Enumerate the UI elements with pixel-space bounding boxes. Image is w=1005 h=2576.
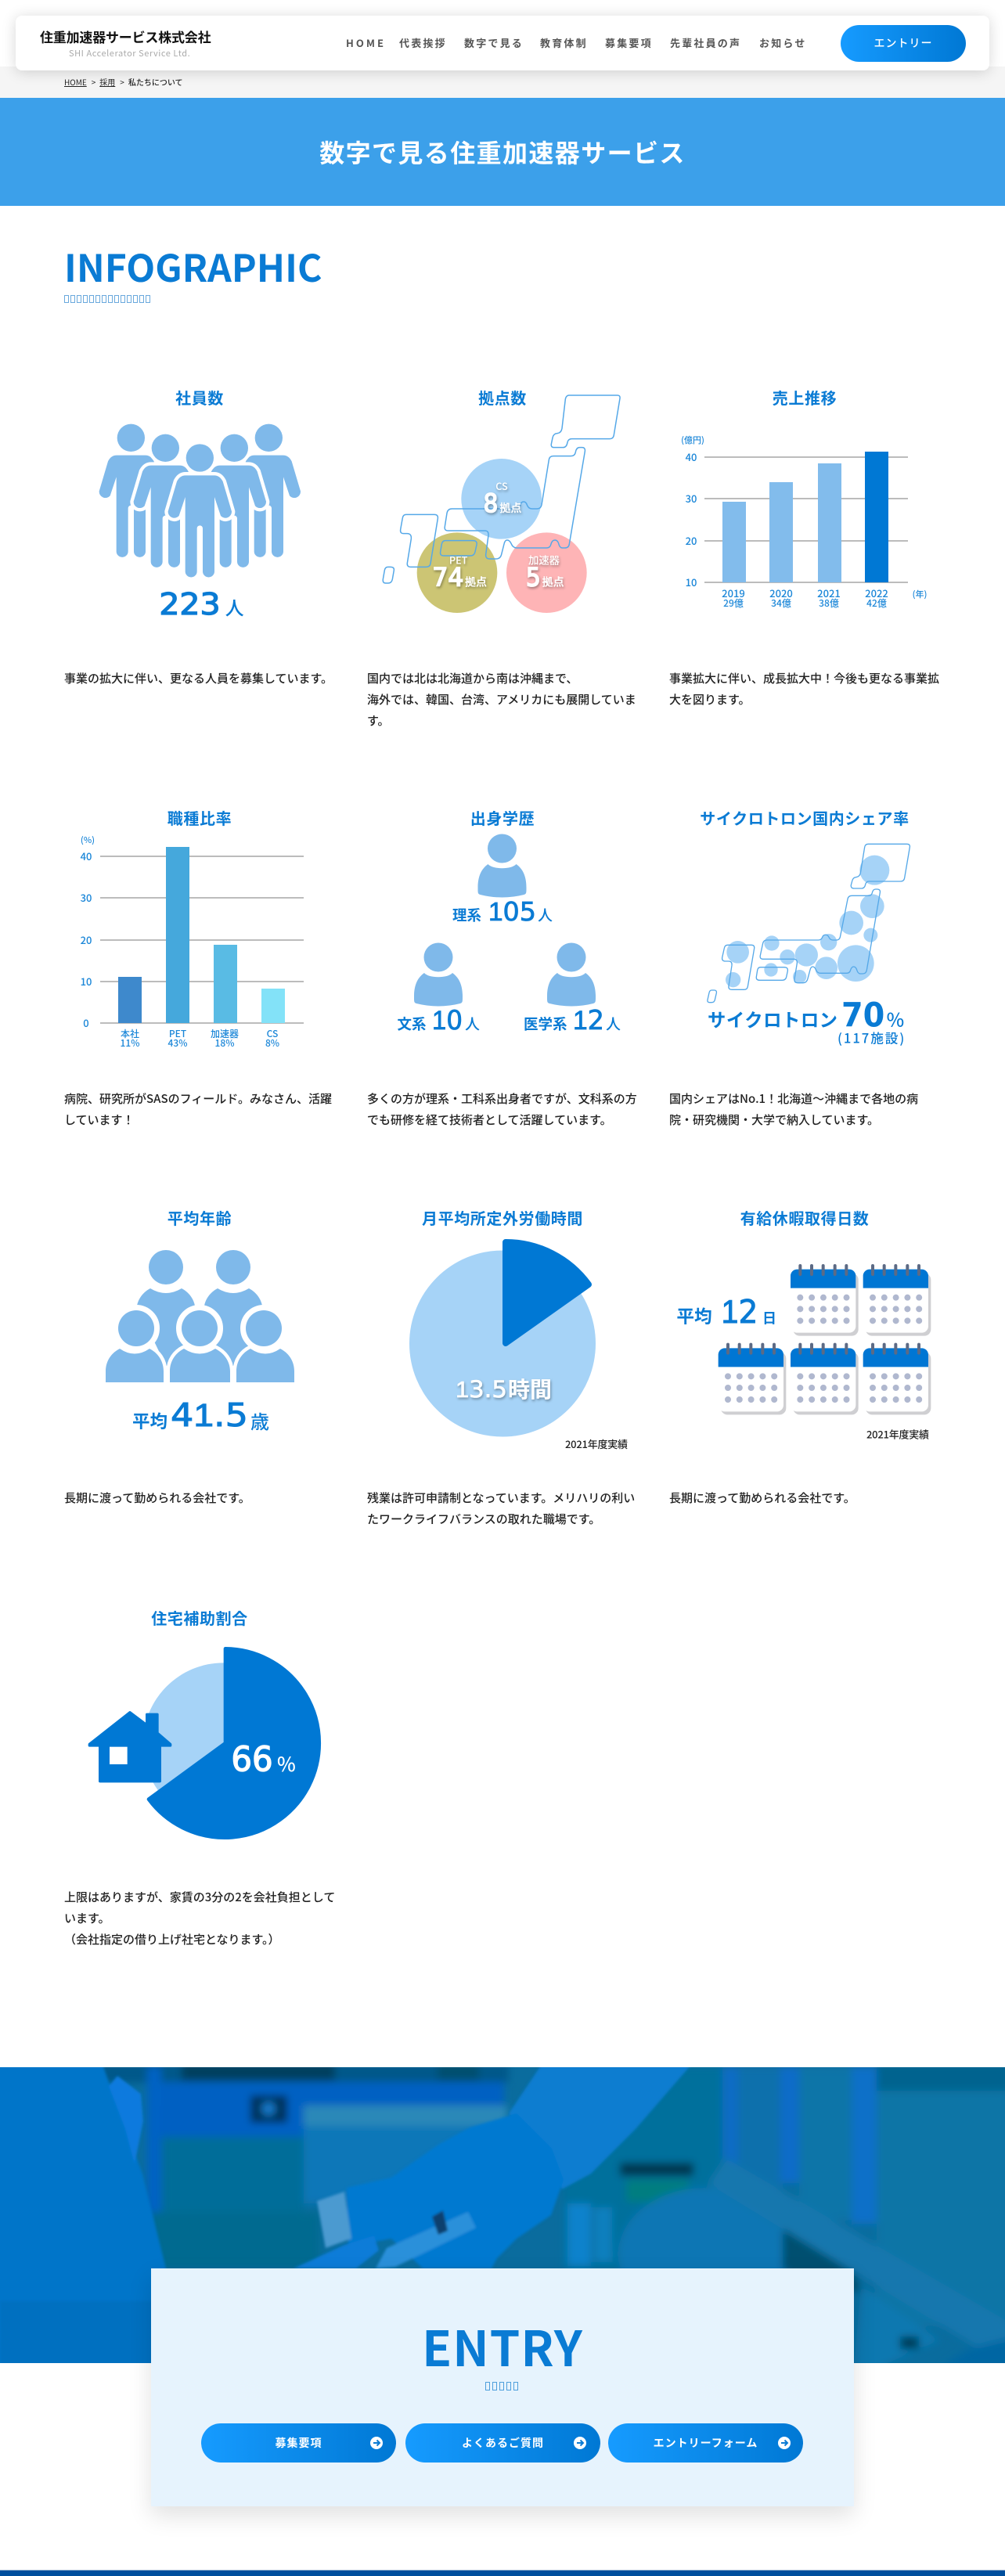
label: accelerator 5: 加速器: [528, 553, 560, 567]
axis labels: 30: [81, 890, 92, 905]
calendar: [719, 1345, 786, 1414]
panel: overtime: [367, 1206, 635, 1527]
icon: five people with count: [99, 424, 301, 622]
description: 海外では、韓国、台湾、アメリカにも展開していま: [367, 691, 636, 708]
value label: [676, 1293, 776, 1331]
note: 2021年度実績: [565, 1436, 628, 1451]
axis labels: [81, 834, 279, 1050]
axis labels: 20: [686, 533, 697, 548]
description: 大を図ります。: [669, 691, 751, 708]
axis labels: PET: [169, 1027, 186, 1040]
share label: (117施設): [838, 1028, 904, 1047]
value: 13.5: [456, 1376, 507, 1403]
heading: 社員数: [175, 386, 224, 409]
axis labels: CS: [267, 1027, 278, 1040]
axis labels: 加速器: [211, 1027, 239, 1040]
axis labels: 38億: [819, 596, 839, 610]
description: [367, 1090, 637, 1128]
medicine: [524, 942, 621, 1036]
breadcrumb background strip: [0, 67, 1005, 98]
icons: three busts with counts: [398, 834, 621, 1036]
navigation: [346, 35, 807, 50]
heading: 住宅補助割合: [151, 1606, 248, 1629]
panel: job types: [64, 806, 332, 1128]
description: います。: [64, 1910, 110, 1926]
footer strip: [0, 2570, 1005, 2576]
description: 多くの方が理系・工科系出身者ですが、文科系の方: [367, 1090, 637, 1107]
nav item: 教育体制: [540, 35, 588, 50]
liberal arts: [398, 942, 480, 1036]
nav item: 先輩社員の声: [670, 35, 741, 50]
axis labels: 30: [686, 491, 697, 506]
breadcrumb: HOME > 採用 > 私たちについて: [64, 76, 183, 88]
nav item: 代表挨拶: [399, 35, 447, 50]
description: 院・研究機関・大学で納入しています。: [669, 1111, 879, 1128]
button: FAQ: よくあるご質問: [462, 2435, 544, 2451]
science: [452, 834, 553, 927]
button: entry form: [608, 2423, 803, 2463]
description: [367, 1490, 635, 1527]
share label: [708, 996, 904, 1047]
share label: 70: [841, 996, 884, 1036]
icon: five calendars with value: [676, 1264, 931, 1441]
axis labels: 11%: [121, 1036, 139, 1050]
label: CS 8: [484, 478, 521, 518]
section heading: INFOGRAPHIC: [64, 238, 322, 293]
bar chart: job ratio: [80, 834, 304, 1050]
heading: 出身学歴: [470, 806, 535, 829]
subheading: missing-glyph boxes: [485, 2382, 518, 2390]
axis labels: 10: [81, 974, 92, 989]
page title band: [0, 98, 1005, 206]
description: 事業拡大に伴い、成長拡大中！今後も更なる事業拡: [669, 670, 939, 686]
header bar: [16, 16, 989, 70]
nav item: お知らせ: [759, 35, 807, 50]
heading: 拠点数: [478, 386, 527, 409]
description: [64, 1090, 332, 1128]
axis labels: 0: [83, 1015, 89, 1030]
count: 223 people: 人: [225, 593, 244, 621]
entry banner photo: [0, 2067, 1005, 2363]
medicine: 人: [606, 1013, 621, 1034]
medicine: 医学系: [524, 1014, 567, 1034]
count: 223 people: 223: [159, 587, 221, 622]
description: 国内では北は北海道から南は沖縄まで、: [367, 670, 578, 686]
description: たワークライフバランスの取れた職場です。: [367, 1511, 600, 1527]
description: [64, 1889, 335, 1947]
bar chart: sales 2019-2022: [681, 434, 927, 610]
age label: 歳: [250, 1407, 269, 1434]
entry button: エントリー: [874, 35, 933, 51]
axis labels: 2020: [769, 585, 793, 600]
section subheading: missing-glyph boxes: [64, 295, 150, 303]
axis labels: 2021: [817, 585, 841, 600]
axis labels: 2019: [722, 585, 745, 600]
icon: group of five busts with age: [106, 1250, 294, 1434]
note: 2021年度実績: [866, 1426, 929, 1441]
button: job requirements: [201, 2423, 396, 2463]
axis labels: 34億: [771, 596, 791, 610]
description: 病院、研究所がSASのフィールド。みなさん、活躍: [64, 1090, 332, 1107]
axis labels: 20: [81, 932, 92, 947]
axis labels: 29億: [723, 596, 744, 610]
logo name: 住重加速器サービス株式会社: [40, 27, 211, 46]
entry button: [841, 25, 966, 62]
heading: 月平均所定外労働時間: [422, 1206, 583, 1229]
label: accelerator 5: 5: [526, 562, 541, 592]
pie chart: housing subsidy: [88, 1647, 321, 1839]
panel: cyclotron share: [669, 806, 918, 1128]
panel: paid leave: [669, 1206, 931, 1506]
axis labels: [681, 434, 927, 610]
page title band: 数字で見る住重加速器サービス: [319, 134, 686, 170]
value: [456, 1373, 552, 1404]
value: 時間: [508, 1373, 552, 1404]
entry panel: [151, 2268, 854, 2506]
label: accelerator 5: [526, 553, 564, 592]
label: CS 8: CS: [495, 478, 508, 493]
icon: house: [89, 1713, 171, 1782]
science: 理系: [452, 905, 481, 925]
nav item: 数字で見る: [464, 35, 524, 50]
axis labels: 10: [686, 575, 697, 589]
axis labels: (年): [913, 588, 927, 600]
heading: ENTRY: [422, 2310, 583, 2380]
axis labels: 40: [686, 449, 697, 464]
axis labels: 18%: [215, 1036, 234, 1050]
description: （会社指定の借り上げ社宅となります。）: [64, 1931, 280, 1947]
description: [669, 670, 939, 708]
axis labels: 40: [81, 848, 92, 863]
panel: employees: [64, 386, 333, 686]
medicine: 12: [573, 1005, 604, 1036]
icon: arrow: [574, 2437, 586, 2449]
count: 223 people: [159, 587, 244, 622]
science: 人: [538, 904, 553, 925]
bars: [118, 847, 285, 1023]
panel: housing subsidy: [64, 1606, 335, 1947]
map: Japan with location circles: [382, 395, 621, 613]
logo english name: SHI Accelerator Service Ltd.: [69, 47, 190, 59]
description: す。: [367, 712, 390, 729]
value label: 平均: [676, 1302, 712, 1328]
heading: 売上推移: [773, 386, 837, 409]
label: PET 74: 74: [432, 562, 463, 592]
axis labels: 8%: [265, 1036, 279, 1050]
panel: average age: [64, 1206, 294, 1506]
description: 事業の拡大に伴い、更なる人員を募集しています。: [64, 670, 333, 686]
axis labels: (%): [81, 834, 95, 846]
share label: サイクロトロン: [708, 1006, 838, 1032]
description: でも研修を経て技術者として活躍しています。: [367, 1111, 612, 1128]
calendar: [863, 1266, 931, 1336]
age label: 41.5: [171, 1396, 248, 1434]
panel: sales: [669, 386, 939, 708]
age label: 平均: [132, 1408, 168, 1433]
value label: 12: [722, 1293, 758, 1331]
nav item: HOME: [346, 35, 386, 50]
value: [231, 1740, 296, 1779]
axis labels: (億円): [681, 434, 704, 446]
heading: 有給休暇取得日数: [740, 1206, 869, 1229]
heading: 職種比率: [168, 806, 232, 829]
value: %: [277, 1749, 296, 1778]
label: PET 74: PET: [449, 552, 468, 567]
description: しています！: [64, 1111, 135, 1128]
description: 残業は許可申請制となっています。メリハリの利い: [367, 1490, 635, 1506]
heading: サイクロトロン国内シェア率: [700, 806, 910, 829]
calendar: [791, 1345, 859, 1414]
description: [367, 670, 636, 729]
share label: %: [887, 1005, 904, 1032]
icon: arrow: [778, 2437, 791, 2449]
liberal arts: 文系: [398, 1014, 427, 1034]
axis labels: 43%: [168, 1036, 187, 1050]
axis labels: 本社: [121, 1027, 139, 1040]
calendar: [863, 1345, 931, 1414]
description: 国内シェアはNo.1！北海道～沖縄まで各地の病: [669, 1090, 918, 1107]
button: entry form: エントリーフォーム: [654, 2435, 758, 2451]
label: PET 74: 拠点: [465, 574, 487, 589]
map: Japan with facility circles: [707, 844, 911, 1047]
science: 105: [488, 896, 536, 927]
description: [669, 1090, 918, 1128]
label: PET 74: [432, 552, 487, 592]
value: 66: [231, 1740, 273, 1779]
button: job requirements: 募集要項: [276, 2435, 322, 2451]
calendar: [791, 1266, 859, 1336]
value label: 日: [762, 1308, 776, 1328]
button: FAQ: [405, 2423, 600, 2463]
label: accelerator 5: 拠点: [542, 574, 564, 589]
label: CS 8: 拠点: [499, 500, 521, 516]
axis labels: 2022: [865, 585, 888, 600]
heading: 平均年齢: [168, 1206, 232, 1229]
description: 長期に渡って勤められる会社です。: [64, 1490, 250, 1506]
description: 上限はありますが、家賃の3分の2を会社負担として: [64, 1889, 335, 1905]
age label: [132, 1396, 269, 1434]
panel: locations: [367, 386, 636, 729]
panel: academic background: [367, 806, 637, 1128]
axis labels: 42億: [866, 596, 887, 610]
liberal arts: 人: [465, 1013, 480, 1034]
liberal arts: 10: [432, 1005, 463, 1036]
nav item: 募集要項: [605, 35, 653, 50]
pie chart: overtime hours: [409, 1239, 628, 1451]
bars: [722, 452, 888, 582]
description: 長期に渡って勤められる会社です。: [669, 1490, 856, 1506]
label: CS 8: 8: [484, 488, 498, 518]
icon: arrow: [370, 2437, 383, 2449]
